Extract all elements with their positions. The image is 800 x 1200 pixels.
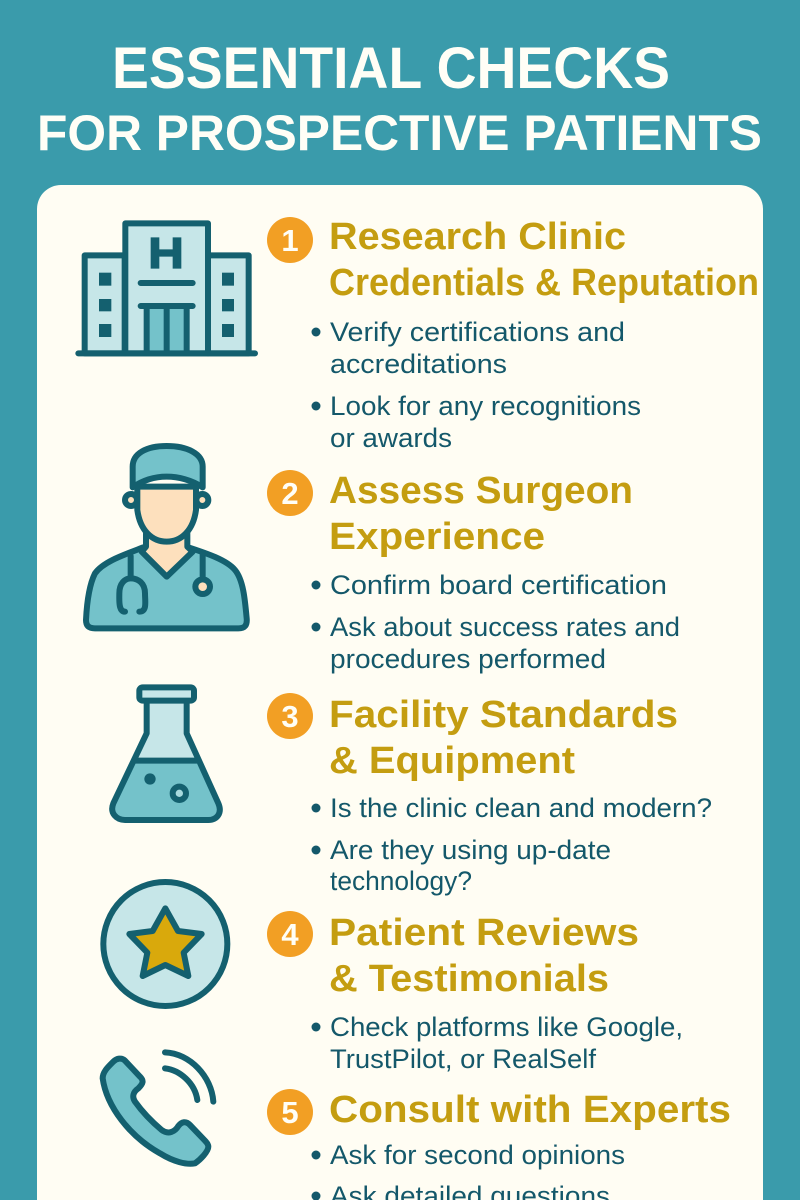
badge: number 1: [267, 217, 313, 263]
icon: telephone: [103, 1052, 213, 1164]
heading: assess surgeon experience: [329, 470, 633, 558]
title: ESSENTIAL CHECKS: [112, 36, 670, 101]
bullet list 1: [312, 317, 641, 453]
bullet list 4: TrustPilot, or RealSelf: [330, 1044, 597, 1074]
bullet list 5: Ask for second opinions: [330, 1140, 625, 1170]
badge: number 3: [267, 693, 313, 739]
badge: number 2: [267, 470, 313, 516]
bullet list 3: Are they using up-date: [330, 835, 611, 865]
badge: number 5: [267, 1089, 313, 1135]
bullet list 5: [312, 1140, 625, 1200]
heading: assess surgeon experience: Assess Surgeon: [329, 470, 633, 512]
heading: research clinic credentials: [329, 216, 759, 304]
bullet list 2: [312, 570, 680, 674]
icon: flask: [112, 687, 220, 820]
bullet list 2: procedures performed: [330, 644, 606, 674]
heading: patient reviews and testimonials: [329, 912, 639, 1000]
title: [37, 36, 762, 161]
icon: star badge: [103, 882, 227, 1006]
icon: hospital building: [78, 223, 255, 353]
section 1: clinic credentials: [78, 216, 759, 453]
heading: patient reviews and testimonials: & Testimonials: [329, 958, 609, 1000]
badge: number 4: [267, 911, 313, 957]
bullet list 1: accreditations: [330, 349, 507, 379]
bullet list 1: or awards: [330, 423, 452, 453]
icon: surgeon: [86, 446, 247, 628]
badge: number 1: 1: [281, 223, 299, 258]
section 2: surgeon experience: [86, 446, 680, 674]
heading: assess surgeon experience: Experience: [329, 516, 545, 558]
title: FOR PROSPECTIVE PATIENTS: [37, 105, 762, 161]
bullet list 4: Check platforms like Google,: [330, 1012, 683, 1042]
badge: number 3: 3: [281, 699, 299, 734]
heading: facility standards and equipment: [329, 694, 678, 782]
panel: checklist card: [37, 185, 763, 1200]
badge: number 4: 4: [281, 917, 299, 952]
section 3: facility standards: [112, 687, 712, 896]
heading: research clinic credentials: Credentials & Reputation: [329, 262, 759, 304]
badge: number 2: 2: [281, 476, 299, 511]
bullet list 3: [312, 793, 712, 896]
heading: consult with experts: Consult with Experts: [329, 1089, 731, 1131]
bullet list 2: Ask about success rates and: [330, 612, 680, 642]
bullet list 2: Confirm board certification: [330, 570, 667, 600]
heading: facility standards and equipment: & Equipment: [329, 740, 575, 782]
heading: facility standards and equipment: Facility Standards: [329, 694, 678, 736]
section 5: consult with experts: [103, 1052, 731, 1200]
badge: number 5: 5: [281, 1095, 299, 1130]
bullet list 1: Verify certifications and: [330, 317, 625, 347]
heading: patient reviews and testimonials: Patient Reviews: [329, 912, 639, 954]
bullet list 3: Is the clinic clean and modern?: [330, 793, 712, 823]
section 4: patient reviews: [103, 882, 683, 1074]
bullet list 3: technology?: [330, 866, 472, 896]
bullet list 4: [312, 1012, 683, 1074]
bullet list 1: Look for any recognitions: [330, 391, 641, 421]
heading: research clinic credentials: Research Clinic: [329, 216, 626, 258]
